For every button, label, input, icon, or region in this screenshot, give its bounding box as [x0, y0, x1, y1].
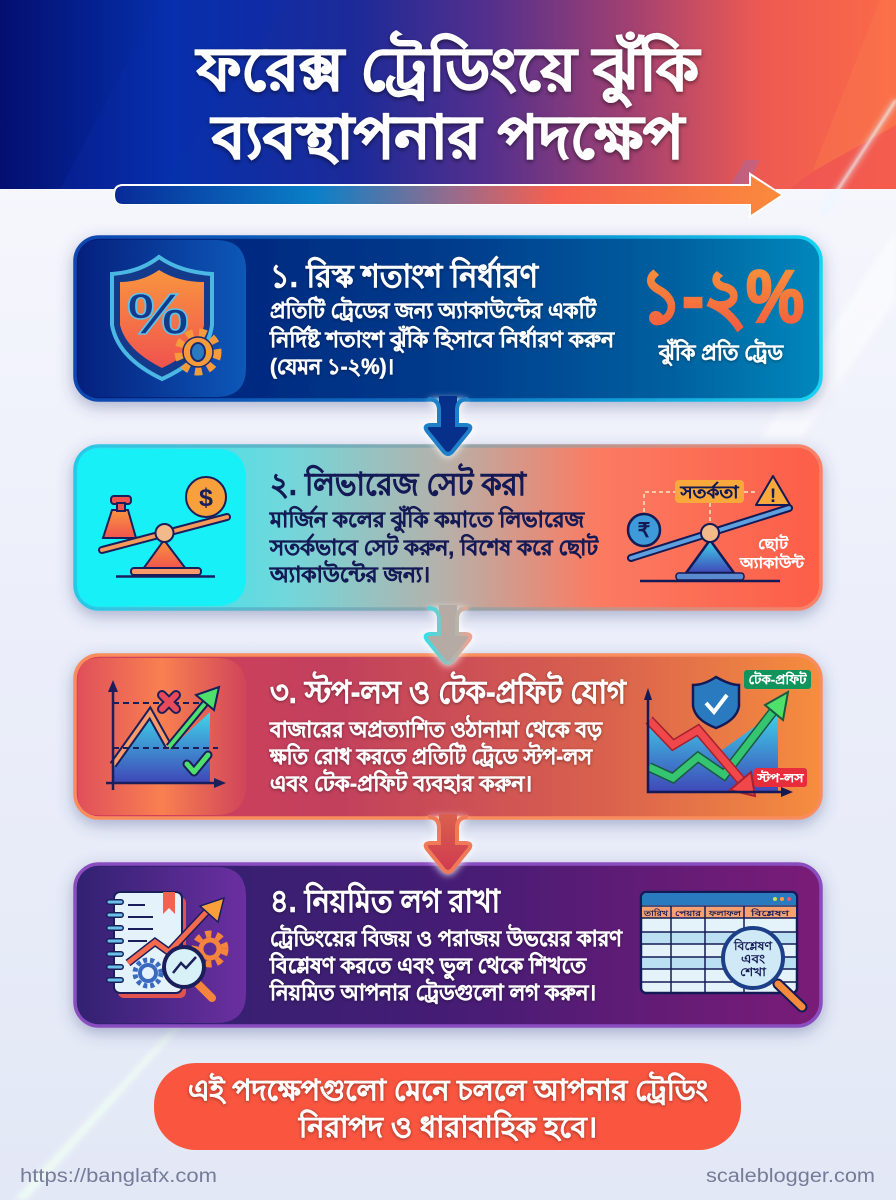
illustration: take-profit and stop-loss chart — [644, 670, 811, 797]
step 4 body: ট্রেডিংয়ের বিজয় ও পরাজয় উভয়ের কারণ — [270, 924, 623, 951]
stop-loss label — [754, 768, 807, 787]
icon: balance with weight and coin: $ — [199, 484, 213, 512]
step 2 body — [269, 505, 599, 587]
step 1 body: প্রতিটি ট্রেডের জন্য অ্যাকাউন্টের একটি — [270, 296, 597, 323]
step 1 body: নির্দিষ্ট শতাংশ ঝুঁকি হিসাবে নির্ধারণ করুন — [269, 325, 615, 354]
step 4 body: বিশ্লেষণ করতে এবং ভুল থেকে শিখতে — [269, 952, 587, 981]
connector arrow 1 — [426, 396, 470, 454]
take-profit label — [744, 670, 811, 689]
small account label: অ্যাকাউন্ট — [739, 553, 805, 572]
panel: step 1 — [75, 237, 821, 400]
panel: step 3 — [75, 655, 821, 818]
illustration: caution balance: ! — [770, 486, 776, 507]
caution label — [675, 480, 744, 503]
icon: stop-loss chart — [106, 680, 226, 790]
illustration: caution balance: ₹ — [638, 520, 651, 542]
step 1 body: (যেমন ১-২%)। — [270, 354, 394, 379]
illustration: trade log table with magnifier: পেয়ার — [675, 909, 702, 918]
icon tile — [78, 867, 246, 1023]
icon tile — [78, 449, 246, 606]
step 2 body: অ্যাকাউন্টের জন্য। — [269, 560, 430, 587]
connector arrow 3 — [426, 814, 470, 872]
fulcrum — [686, 540, 734, 573]
stat: 1-2 percent — [640, 255, 804, 367]
stat: 1-2 percent: ঝুঁকি প্রতি ট্রেড — [658, 338, 784, 367]
step 2 body: সতর্কভাবে সেট করুন, বিশেষ করে ছোট — [269, 533, 599, 560]
illustration: trade log table with magnifier: বিশ্লেষণ — [733, 938, 773, 953]
step 4 body — [269, 924, 623, 1005]
title arrow — [113, 172, 784, 219]
connector arrow 2 — [426, 605, 470, 663]
small account label — [739, 534, 805, 572]
illustration: take-profit and stop-loss chart: স্টপ-লস — [756, 770, 805, 785]
illustration: take-profit and stop-loss chart: টেক-প্রফিট — [748, 671, 807, 687]
step 3 body: বাজারের অপ্রত্যাশিত ওঠানামা থেকে বড় — [269, 715, 603, 742]
step 3 body: এবং টেক-প্রফিট ব্যবহার করুন। — [270, 769, 532, 796]
icon: shield with percent and gear: % — [127, 282, 189, 347]
step 2 heading: ২. লিভারেজ সেট করা — [270, 463, 528, 502]
step 2 body: মার্জিন কলের ঝুঁকি কমাতে লিভারেজ — [269, 505, 585, 534]
closing callout: এই পদক্ষেপগুলো মেনে চললে আপনার ট্রেডিং — [188, 1071, 709, 1107]
icon: shield check — [693, 677, 739, 728]
step 4 body: নিয়মিত আপনার ট্রেডগুলো লগ করুন। — [269, 978, 596, 1005]
step 3 body: ক্ষতি রোধ করতে প্রতিটি ট্রেডে স্টপ-লস — [269, 742, 593, 769]
illustration: trade log table with magnifier: শেখা — [740, 965, 767, 979]
icon tile — [78, 658, 246, 815]
warning triangle — [756, 476, 790, 505]
footer source left: https://banglafx.com — [20, 1166, 217, 1187]
step 1 heading: ১. রিস্ক শতাংশ নির্ধারণ — [270, 256, 540, 294]
icon: log book with growth arrow — [109, 892, 225, 998]
step 1 body — [269, 296, 615, 379]
illustration: caution balance — [628, 476, 805, 581]
closing callout: নিরাপদ ও ধারাবাহিক হবে। — [298, 1109, 597, 1144]
footer source right: scaleblogger.com — [706, 1166, 875, 1187]
stat: 1-2 percent: ১-২% — [640, 255, 804, 338]
illustration: trade log table with magnifier: এবং — [741, 952, 766, 966]
icon: balance with weight and coin — [102, 477, 227, 576]
icon: shield with percent and gear — [112, 257, 217, 379]
illustration: trade log table with magnifier: তারিখ — [643, 908, 669, 918]
illustration: trade log table with magnifier: ফলাফল — [708, 909, 742, 918]
illustration: caution balance: সতর্কতা — [679, 481, 740, 502]
icon tile — [78, 240, 246, 397]
closing callout — [154, 1063, 741, 1150]
illustration: trade log table with magnifier: বিশ্লেষণ — [749, 908, 791, 918]
step 4 heading: ৪. নিয়মিত লগ রাখা — [270, 881, 502, 919]
title: ব্যবস্থাপনার পদক্ষেপ — [210, 104, 686, 171]
step 3 heading: ৩. স্টপ-লস ও টেক-প্রফিট যোগ — [270, 671, 627, 710]
panel: step 4 — [75, 864, 821, 1026]
title — [195, 30, 701, 171]
small account label: ছোট — [758, 534, 789, 553]
panel: step 2 — [75, 446, 821, 609]
header banner — [0, 0, 896, 215]
title: ফরেক্স ট্রেডিংয়ে ঝুঁকি — [195, 30, 701, 108]
step 3 body — [269, 715, 603, 796]
illustration: trade log table with magnifier — [641, 892, 802, 1007]
